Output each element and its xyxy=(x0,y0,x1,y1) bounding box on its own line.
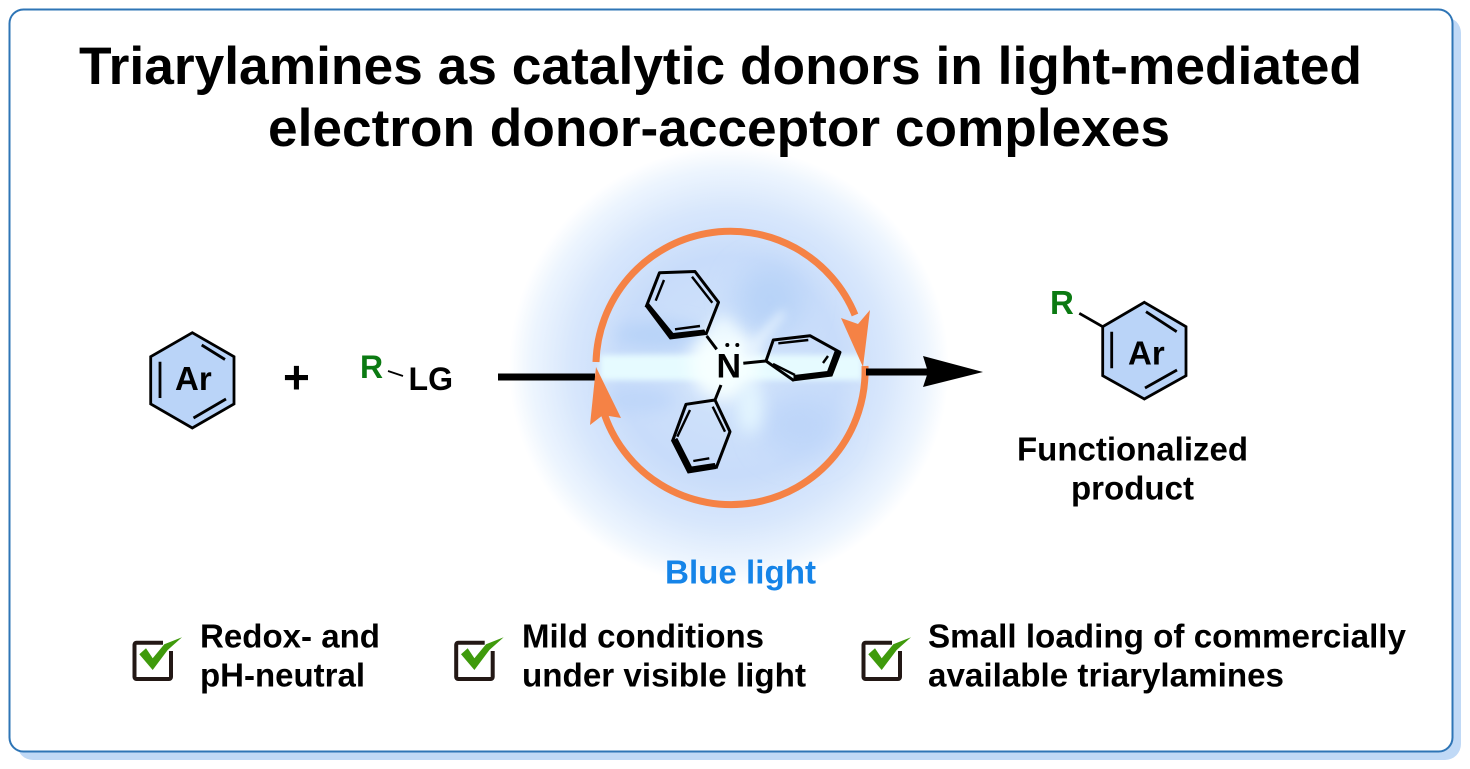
icon: checkbox xyxy=(456,637,504,679)
feature: redox neutral: Redox- and xyxy=(200,618,380,654)
plus sign: + xyxy=(283,351,310,403)
icon: checkbox xyxy=(864,637,911,679)
title: electron donor-acceptor complexes xyxy=(268,99,1170,158)
reaction arrow in xyxy=(498,374,595,380)
reaction arrow out xyxy=(866,356,983,387)
catalytic cycle arrows xyxy=(590,231,870,505)
feature: mild conditions: under visible light xyxy=(522,656,806,694)
reactant: R-LG: R xyxy=(360,349,383,385)
icon: checkbox xyxy=(134,637,182,679)
product label: Functionalized xyxy=(1017,430,1248,468)
product structure: Ar xyxy=(1128,334,1165,372)
title: Triarylamines as catalytic donors in light-mediated xyxy=(79,37,1362,96)
reactant: Ar ring xyxy=(151,333,234,428)
upper phenyl ring xyxy=(646,272,718,349)
reactant: R-LG: LG xyxy=(408,361,453,397)
feature: mild conditions: Mild conditions xyxy=(522,618,764,654)
feature: small loading: Small loading of commercially xyxy=(928,618,1407,654)
lower phenyl ring xyxy=(672,385,730,473)
feature: redox neutral xyxy=(134,618,380,694)
product structure: R xyxy=(1050,284,1074,321)
reactant: Ar ring: Ar xyxy=(175,360,212,397)
title xyxy=(79,37,1362,158)
feature: mild conditions xyxy=(456,618,806,694)
blue light label: Blue light xyxy=(665,554,816,590)
product label xyxy=(1017,430,1248,506)
product label: product xyxy=(1071,470,1194,506)
feature: small loading xyxy=(864,618,1407,694)
product structure xyxy=(1050,284,1186,399)
nitrogen atom with lone pair: N xyxy=(716,348,741,386)
triphenylamine catalyst xyxy=(646,272,841,473)
right phenyl ring xyxy=(743,336,841,381)
feature: small loading: available triarylamines xyxy=(928,656,1284,694)
blue light glow xyxy=(509,147,949,587)
feature: redox neutral: pH-neutral xyxy=(200,656,365,694)
reactant: R-LG xyxy=(360,349,453,397)
